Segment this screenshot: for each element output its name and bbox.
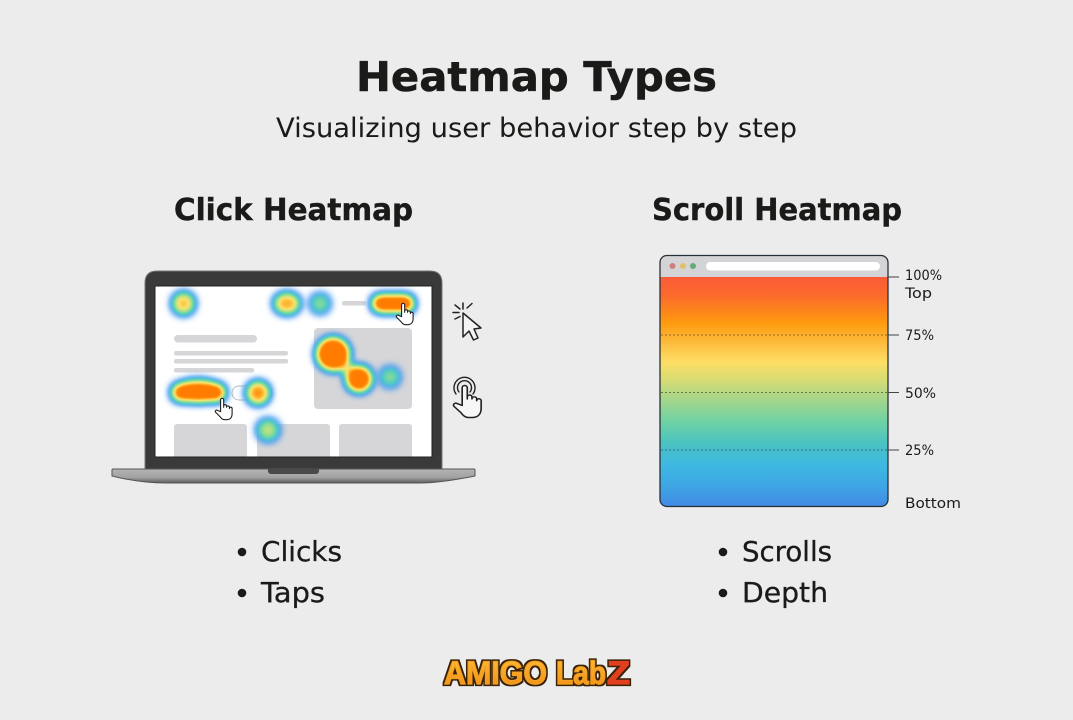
logo: AMIGO LabZ: Z	[607, 655, 630, 691]
address bar	[706, 262, 880, 270]
subtitle: Visualizing user behavior step by step	[276, 113, 797, 144]
panel: click heatmap	[112, 193, 481, 609]
bullet list: scroll: Depth	[742, 576, 828, 609]
icon: tap hand	[454, 377, 481, 418]
bullet list: click: Clicks	[261, 535, 342, 568]
screen border	[155, 286, 432, 457]
bullet list: scroll	[719, 535, 832, 609]
logo: AMIGO LabZ: AMIGO	[444, 655, 547, 691]
scale labels: 100%	[905, 268, 942, 284]
bullet list: click	[238, 535, 342, 609]
gradient area	[660, 277, 888, 506]
scale labels: 50%	[905, 386, 936, 402]
heat blobs	[172, 292, 414, 441]
outline button	[232, 386, 272, 400]
scale ticks	[888, 277, 899, 450]
laptop base	[112, 469, 475, 483]
window controls	[670, 263, 696, 269]
panel: scroll heatmap	[652, 193, 961, 609]
laptop lid	[145, 271, 442, 470]
window border	[660, 256, 888, 506]
laptop illustration with click heatmap	[112, 271, 475, 483]
page wireframe	[174, 301, 412, 464]
heading: scroll heatmap: Scroll Heatmap	[652, 193, 902, 228]
browser window with scroll gradient	[660, 256, 888, 506]
scale labels: Top	[904, 286, 932, 302]
scale labels: 75%	[905, 328, 934, 344]
laptop notch	[268, 469, 319, 474]
hand cursor: left button	[215, 398, 232, 420]
browser chrome	[660, 256, 888, 277]
title: Heatmap Types	[356, 53, 717, 101]
scale labels: 25%	[905, 443, 934, 459]
bullet list: click: Taps	[260, 576, 325, 609]
logo: AMIGO LabZ: Lab	[556, 655, 606, 691]
logo: AMIGO LabZ	[444, 655, 630, 691]
bullet list: scroll: Scrolls	[742, 535, 832, 568]
heading: click heatmap: Click Heatmap	[174, 193, 413, 228]
scale labels: Bottom	[905, 496, 961, 512]
hand cursor: top button	[396, 303, 413, 325]
scale labels	[904, 268, 961, 512]
laptop screen	[155, 286, 432, 464]
icon: click cursor	[453, 303, 481, 340]
